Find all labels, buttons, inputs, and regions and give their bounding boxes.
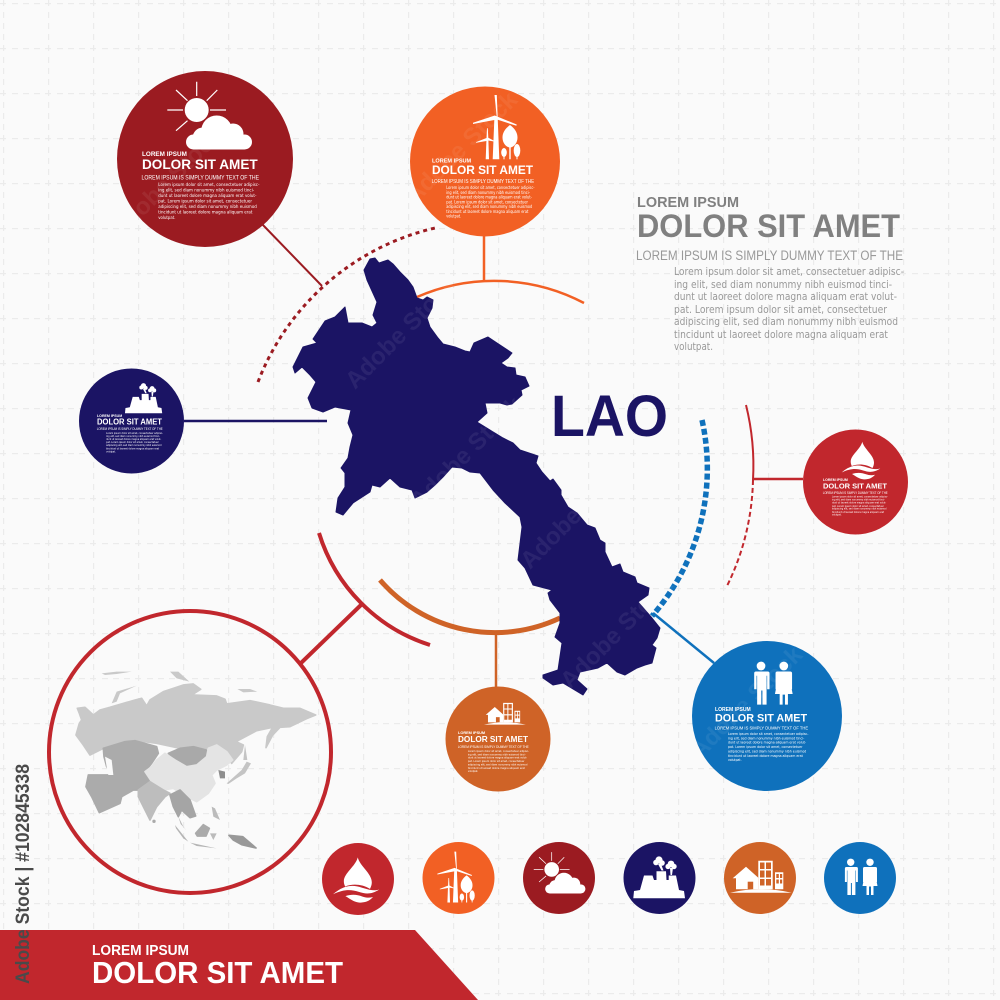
icon: people: [754, 662, 793, 705]
heading block: grey text: LOREM IPSUM: [637, 195, 739, 211]
text: energy: [432, 159, 535, 219]
panel: orange energy circle: [410, 86, 560, 236]
heading block: grey text: adipiscing elit, sed diam nonummy nibh euismod: [674, 316, 898, 328]
banner heading: LOREM IPSUM: [92, 943, 189, 959]
icon row: [322, 842, 896, 915]
heading block: grey text: Lorem ipsum dolor sit amet, consectetuer adipisc-: [674, 266, 904, 278]
text: energy: LOREM IPSUM IS SIMPLY DUMMY TEXT OF THE: [432, 179, 535, 185]
heading block: grey text: tincidunt ut laoreet dolore magna aliquam erat: [674, 329, 888, 341]
text: population: DOLOR SIT AMET: [715, 713, 807, 725]
heading block: grey text: pat. Lorem ipsum dolor sit amet, consectetuer: [674, 304, 888, 316]
text: water: DOLOR SIT AMET: [823, 481, 887, 490]
text: energy: LOREM IPSUM: [432, 159, 472, 165]
text: housing: [458, 731, 529, 773]
watermark: diagonal stock marks: Adobe Stock: [685, 641, 808, 764]
text: industry: Lorem ipsum dolor sit amet, consectetuer adipisc-: [106, 431, 163, 435]
icon: house and buildings: [484, 703, 526, 725]
text: water: dunt ut laoreet dolore magna aliquam erat volut-: [832, 501, 886, 505]
text: water: ing elit, sed diam nonummy nibh euismod tinci-: [832, 498, 885, 502]
watermark: diagonal stock marks: Adobe Stock: [105, 121, 228, 244]
text: energy: dunt ut laoreet dolore magna aliquam erat volut-: [446, 194, 532, 199]
text: housing: adipiscing elit, sed diam nonummy nibh euismod: [468, 762, 528, 766]
text: energy: ing elit, sed diam nonummy nibh euismod tinci-: [446, 190, 530, 195]
text: water: [823, 478, 888, 517]
heading block: grey text: DOLOR SIT AMET: [637, 208, 900, 244]
heading block: grey text: ing elit, sed diam nonummy nibh euismod tinci-: [674, 279, 892, 291]
watermark: vertical stock id: Adobe Stock | #102845338: [13, 764, 34, 984]
text: climate: pat. Lorem ipsum dolor sit amet, consectetuer: [158, 199, 252, 205]
text: population: dunt ut laoreet dolore magna aliquam erat volut-: [728, 741, 807, 745]
text: population: LOREM IPSUM IS SIMPLY DUMMY TEXT OF THE: [715, 726, 808, 732]
text: population: adipiscing elit, sed diam nonummy nibh euismod: [728, 749, 806, 753]
text: water: pat. Lorem ipsum dolor sit amet, consectetuer: [832, 504, 885, 508]
text: industry: tincidunt ut laoreet dolore magna aliquam erat: [106, 446, 159, 450]
text: housing: LOREM IPSUM: [458, 731, 485, 735]
text: climate: LOREM IPSUM IS SIMPLY DUMMY TEXT OF THE: [142, 175, 259, 181]
text: industry: DOLOR SIT AMET: [97, 417, 162, 426]
text: industry: LOREM IPSUM IS SIMPLY DUMMY TEXT OF THE: [97, 427, 163, 431]
panel: dark red climate circle: [117, 71, 293, 247]
text: energy: adipiscing elit, sed diam nonummy nibh euismod: [446, 204, 533, 209]
text: climate: [142, 151, 260, 221]
watermark: diagonal stock marks: [105, 86, 808, 764]
text: climate: adipiscing elit, sed diam nonummy nibh euismod: [158, 204, 257, 210]
icon: people badge: [824, 842, 896, 914]
watermark: diagonal stock marks: Adobe Stock: [555, 571, 678, 694]
text: industry: LOREM IPSUM: [97, 414, 122, 418]
text: housing: DOLOR SIT AMET: [458, 734, 529, 744]
panel: red water circle: [803, 430, 908, 534]
text: housing: volutpat.: [468, 769, 478, 773]
text: housing: ing elit, sed diam nonummy nibh euismod tinci-: [468, 753, 526, 757]
text: population: Lorem ipsum dolor sit amet, consectetuer adipisc-: [728, 732, 809, 736]
heading block: grey text: volutpat.: [674, 341, 713, 353]
icon: factory badge: [624, 842, 696, 914]
icon: climate badge: [523, 842, 595, 914]
text: industry: dunt ut laoreet dolore magna aliquam erat volut-: [106, 437, 161, 441]
panel: blue population circle: [692, 641, 842, 791]
watermark: diagonal stock marks: Adobe Stock: [400, 86, 523, 209]
text: energy: DOLOR SIT AMET: [432, 163, 533, 177]
map of Laos: [293, 258, 660, 695]
text: industry: ing elit, sed diam nonummy nibh euismod tinci-: [106, 434, 160, 438]
panel: navy industry circle: [79, 368, 184, 474]
map of Asia: [76, 672, 316, 848]
text: population: pat. Lorem ipsum dolor sit amet, consectetuer: [728, 745, 803, 749]
banner heading: DOLOR SIT AMET: [92, 955, 343, 990]
text: housing: LOREM IPSUM IS SIMPLY DUMMY TEXT OF THE: [458, 745, 529, 749]
text: population: volutpat.: [728, 758, 742, 762]
text: industry: [97, 414, 163, 453]
text: climate: LOREM IPSUM: [142, 151, 187, 158]
heading block: grey text: dunt ut laoreet dolore magna aliquam erat volut-: [674, 291, 897, 303]
text: housing: dunt ut laoreet dolore magna aliquam erat volut-: [468, 756, 527, 760]
text: energy: volutpat.: [446, 214, 461, 219]
text: water: LOREM IPSUM IS SIMPLY DUMMY TEXT OF THE: [823, 491, 888, 495]
watermark: diagonal stock marks: Adobe Stock: [405, 391, 528, 514]
icon: sun and cloud: [167, 82, 252, 150]
text: water: volutpat.: [832, 513, 842, 517]
text: housing: pat. Lorem ipsum dolor sit amet, consectetuer: [468, 759, 525, 763]
icon: factory: [125, 383, 162, 413]
icon: wind energy badge: [422, 842, 494, 914]
watermark: diagonal stock marks: Adobe Stock: [340, 271, 463, 394]
text: industry: adipiscing elit, sed diam nonummy nibh euismod: [106, 443, 162, 447]
text: industry: volutpat.: [106, 449, 116, 453]
panel: Asia locator map ring: [49, 611, 331, 893]
text: industry: pat. Lorem ipsum dolor sit amet, consectetuer: [106, 440, 160, 444]
icon: water drop: [842, 442, 880, 479]
text: population: tincidunt ut laoreet dolore magna aliquam erat: [728, 754, 803, 758]
text: population: ing elit, sed diam nonummy nibh euismod tinci-: [728, 736, 805, 740]
icon: water drop badge: [322, 843, 394, 915]
icon: housing badge: [724, 842, 796, 914]
text: housing: Lorem ipsum dolor sit amet, consectetuer adipisc-: [468, 749, 529, 753]
text: housing: tincidunt ut laoreet dolore magna aliquam erat: [468, 766, 526, 770]
heading block: grey text: LOREM IPSUM IS SIMPLY DUMMY TEXT OF THE: [636, 248, 903, 263]
bottom banner: [0, 930, 478, 1000]
text: water: LOREM IPSUM: [823, 478, 848, 482]
heading block: grey text: [636, 195, 904, 353]
country name: LAO: [551, 384, 668, 449]
text: climate: tincidunt ut laoreet dolore magna aliquam erat: [158, 210, 253, 216]
text: water: adipiscing elit, sed diam nonummy nibh euismod: [832, 507, 887, 511]
text: population: [715, 707, 809, 762]
text: energy: Lorem ipsum dolor sit amet, consectetuer adipisc-: [446, 185, 535, 190]
text: water: tincidunt ut laoreet dolore magna aliquam erat: [832, 510, 884, 514]
icon: wind turbines and trees: [473, 95, 520, 159]
text: climate: Lorem ipsum dolor sit amet, consectetuer adipisc-: [158, 182, 260, 188]
text: climate: volutpat.: [158, 215, 175, 221]
panel: burnt orange housing circle: [446, 686, 550, 792]
text: water: Lorem ipsum dolor sit amet, consectetuer adipisc-: [832, 495, 888, 499]
text: population: LOREM IPSUM: [715, 707, 751, 713]
watermark: diagonal stock marks: Adobe Stock: [515, 451, 638, 574]
connector lines and orbit arcs: [184, 224, 803, 688]
text: climate: dunt ut laoreet dolore magna aliquam erat volut-: [158, 193, 257, 199]
text: climate: DOLOR SIT AMET: [142, 156, 258, 172]
text: energy: tincidunt ut laoreet dolore magna aliquam erat: [446, 209, 529, 214]
text: energy: pat. Lorem ipsum dolor sit amet, consectetuer: [446, 199, 528, 204]
text: climate: ing elit, sed diam nonummy nibh euismod tinci-: [158, 188, 254, 194]
